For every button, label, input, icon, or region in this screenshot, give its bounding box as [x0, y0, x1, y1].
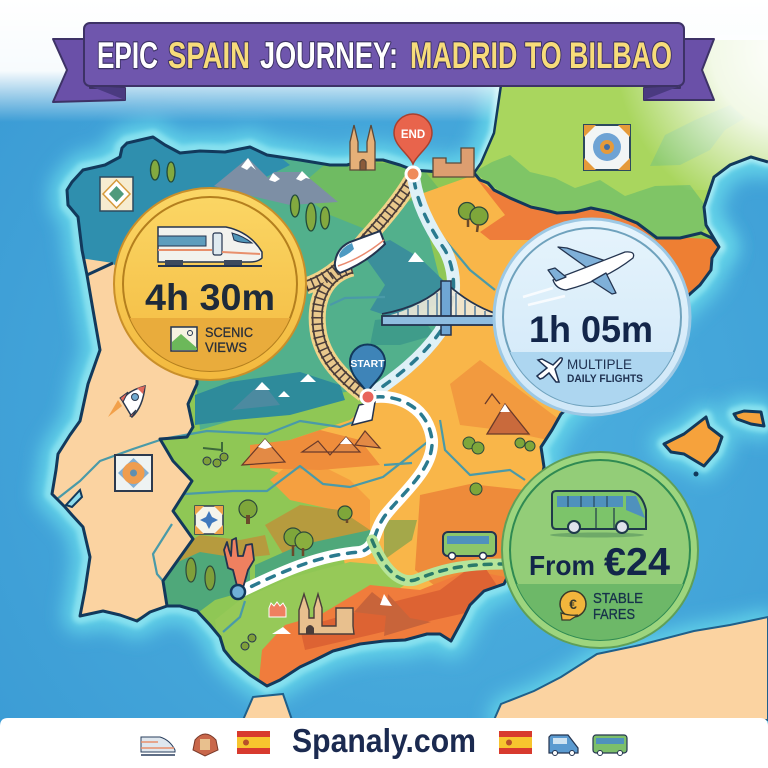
suspension bridge: [382, 281, 497, 335]
region: south east orange: [450, 360, 560, 440]
icon: spanish flag right: [499, 731, 532, 754]
rivers: [57, 240, 525, 632]
icon: footer bus: [593, 735, 627, 756]
region: east deep orange: [654, 238, 718, 293]
title text: [97, 35, 672, 76]
brown mountains centre: [242, 431, 380, 465]
icon: footer van: [549, 735, 578, 756]
label: stable fares: [593, 591, 643, 623]
label: scenic views: SCENIC: [205, 324, 253, 340]
region: centre orange: [270, 469, 370, 530]
badge: flight: [490, 219, 700, 420]
end pin: [394, 114, 432, 164]
region: south red orange: [259, 574, 505, 684]
title text: MADRID TO BILBAO: [410, 35, 672, 76]
label: scenic views: [205, 324, 253, 355]
top white fade: [0, 0, 768, 122]
region: northwest teal: [68, 138, 290, 266]
iberian peninsula land: [30, 130, 725, 690]
region: northern red orange: [476, 178, 654, 240]
label: multiple daily flights: DAILY FLIGHTS: [567, 373, 643, 385]
label: multiple daily flights: [567, 356, 643, 385]
icon: coat of arms: [193, 734, 218, 756]
footer bar: [0, 718, 768, 768]
icon: plane: [523, 247, 634, 305]
coral cactus landmark: [224, 538, 254, 590]
waypoint: blue dot: [231, 585, 245, 599]
brand name: Spanaly.com: [292, 722, 476, 759]
ribbon tail right: [644, 39, 714, 100]
label: multiple daily flights: MULTIPLE: [567, 356, 632, 372]
region: central green: [196, 158, 439, 430]
price: from 24 euro: [529, 541, 670, 584]
start pin: START: [350, 358, 385, 370]
castle: north: [433, 148, 474, 177]
region: north green: [309, 162, 438, 228]
portugal border: [87, 263, 197, 606]
route: road end to start: [372, 180, 454, 394]
mountains south: [272, 592, 431, 636]
title text: EPIC: [97, 35, 158, 76]
train on the map: [335, 231, 385, 273]
trees north west: [150, 160, 330, 231]
price: from 24 euro: From: [529, 550, 595, 581]
price: from 24 euro: €24: [604, 541, 670, 584]
bus on the map: [443, 532, 496, 560]
cathedral: north: [350, 125, 375, 170]
start marker dot: [352, 390, 375, 425]
region: dark teal mountains: [367, 240, 444, 315]
title text: SPAIN: [168, 35, 250, 76]
icon: scenic picture: [171, 327, 197, 351]
ribbon main: [84, 23, 684, 86]
south west trees and olives: [186, 437, 535, 650]
tile: galicia: [100, 177, 133, 211]
railway track: [306, 180, 412, 394]
duration: train: 4h 30m: [145, 277, 275, 318]
label: stable fares: STABLE: [593, 591, 643, 607]
region: olive: [265, 505, 370, 553]
rocket icon: [108, 386, 145, 417]
end marker dot: [406, 167, 420, 181]
region: east yellow-orange: [270, 176, 562, 590]
badge: bus: [500, 452, 700, 650]
region: portugal: [54, 258, 196, 619]
start pin: [350, 344, 385, 393]
mountains teal peaks: [232, 252, 424, 410]
tile: extremadura: [195, 506, 223, 534]
icon: spanish flag left: [237, 731, 270, 754]
france: [474, 40, 768, 247]
title banner: [53, 23, 714, 102]
tile: france: [584, 125, 630, 170]
region: south light green: [344, 562, 404, 590]
end pin: END: [401, 129, 425, 141]
cathedral: south: [269, 594, 354, 634]
route: bus branch: [372, 540, 505, 581]
tile: portugal: [115, 455, 152, 491]
icon: small plane: [537, 358, 562, 382]
title text: JOURNEY:: [260, 35, 398, 76]
icon: euro coin: €: [569, 596, 577, 612]
label: scenic views: VIEWS: [205, 339, 247, 355]
label: stable fares: FARES: [593, 607, 635, 623]
duration: flight: 1h 05m: [529, 309, 653, 350]
icon: train: [158, 227, 262, 266]
route: start to south west: [240, 397, 432, 592]
icon: euro coin: [560, 591, 586, 620]
africa coast: [243, 617, 768, 720]
ribbon tail left: [53, 39, 125, 102]
icon: bus: [550, 491, 646, 538]
northern grey mountains: [214, 158, 338, 205]
badge: train: [113, 187, 307, 381]
right white fade: [625, 40, 768, 190]
icon: footer train: [141, 737, 175, 755]
oak trees east: [458, 202, 488, 232]
balearic islands: [664, 411, 764, 476]
region: south west green: [164, 552, 250, 612]
mountains east: [485, 394, 529, 434]
